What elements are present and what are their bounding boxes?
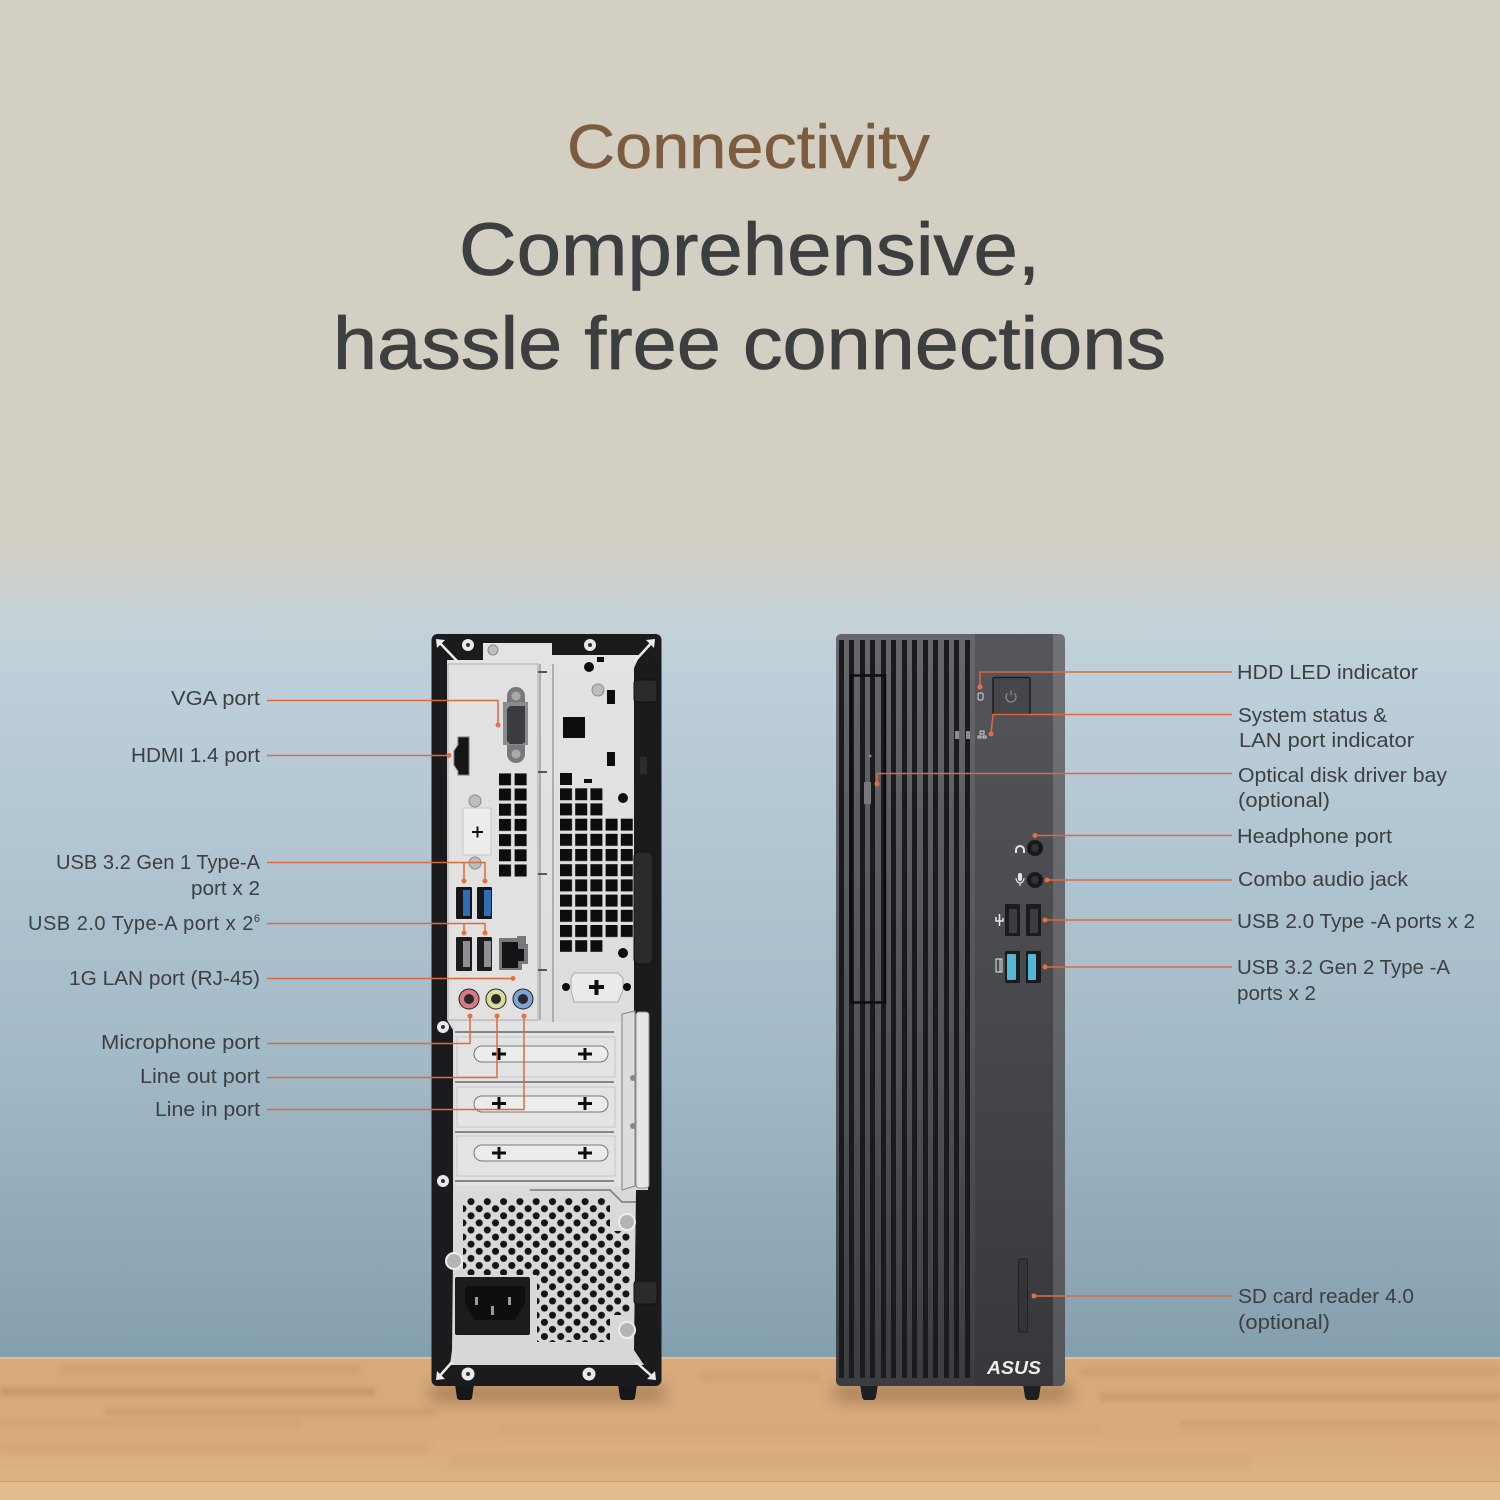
LAN port [499,936,528,970]
subtitle: Connectivity: Connectivity [567,113,930,182]
label: System status and LAN port indicator: LAN port indicator [1239,730,1414,752]
HDMI port [454,737,469,775]
I/O shield [448,664,538,1020]
floor shadows [430,1386,1070,1400]
blanking cover with plus [463,808,491,855]
USB 2.0 ports [456,937,492,971]
label: Line in port: Line in port [155,1099,260,1121]
label: USB 3.2 Gen 1 Type-A port x 2: port x 2 [191,878,260,900]
label: Line out port: Line out port [140,1066,260,1088]
headline: hassle free connections [333,302,1166,385]
front feet [860,1384,1041,1400]
label: 1G LAN port: 1G LAN port (RJ-45) [69,968,260,990]
rear chassis frame [432,634,662,1386]
label: SD card reader 4.0: (optional) [1238,1312,1330,1334]
fin stripes [839,640,970,1378]
bottom right plus cutout [562,973,631,1002]
label: USB 3.2 Gen 1 Type-A port x 2 [56,852,261,900]
HDD and status icons [978,693,986,738]
combo audio jack [1016,872,1044,888]
labels: rear ports [28,688,261,1121]
power button [993,678,1030,714]
ASUS logo: ASUS [986,1358,1041,1378]
rear view of desktop tower [432,634,662,1400]
status LEDs [955,731,959,739]
labels: front ports [1237,662,1475,1334]
label: Combo audio jack: Combo audio jack [1238,869,1409,891]
label: Optical disk driver bay [1238,765,1447,812]
ventilation holes right [560,773,633,952]
upper plate cutouts [563,657,647,958]
label: System status and LAN port indicator: System status & [1238,705,1388,727]
silver back plate [447,643,648,1365]
label: USB 2.0 Type-A port x 2: 6 [254,913,260,925]
audio jacks [459,989,533,1009]
headline [333,208,1166,385]
label: SD card reader 4.0 [1238,1286,1414,1334]
label: USB 2.0 Type -A ports x 2: USB 2.0 Type -A ports x 2 [1237,911,1475,933]
label: USB 3.2 Gen 2 Type -A ports x 2: USB 3.2 Gen 2 Type -A [1237,957,1451,979]
USB 3.2 Gen 1 ports [456,887,492,919]
headline: Comprehensive, [459,208,1040,291]
side clips [634,680,657,1304]
callout lines: rear [267,700,526,1110]
label: VGA port: VGA port [171,688,260,710]
VGA port [503,687,528,763]
PSU screws [446,1214,635,1338]
label: HDD LED indicator: HDD LED indicator [1237,662,1418,684]
SD card slot [1018,1259,1028,1332]
optical drive bay [851,676,885,1002]
power socket [455,1277,530,1335]
label: USB 3.2 Gen 2 Type -A ports x 2: ports x 2 [1237,983,1316,1005]
side strip [1053,634,1065,1386]
divider rail [540,664,553,1022]
front body [836,634,1065,1386]
front USB 3.2 ports [996,951,1041,983]
wooden floor [0,1357,1500,1500]
label: Microphone port: Microphone port [101,1032,260,1054]
front view of desktop tower [836,634,1065,1400]
expansion slots [455,1011,649,1202]
label: HDMI 1.4 port: HDMI 1.4 port [131,745,260,767]
screws [469,645,604,869]
label: System status and LAN port indicator [1238,705,1414,752]
fin panel [836,634,975,1386]
label: USB 3.2 Gen 1 Type-A port x 2: USB 3.2 Gen 1 Type-A [56,852,261,874]
label: Optical disk driver bay: (optional) [1238,790,1330,812]
label: USB 2.0 Type-A port x 2: USB 2.0 Type-A port x 2 [28,913,253,935]
corner arrows and mounting holes [436,634,656,1380]
label: Headphone port: Headphone port [1237,826,1392,848]
ventilation holes left [499,773,527,878]
rear feet [455,1384,637,1400]
label: SD card reader 4.0: SD card reader 4.0 [1238,1286,1414,1308]
callout lines: front [874,672,1232,1298]
PSU vent [463,1198,630,1342]
headphone port [1016,840,1044,856]
label: USB 3.2 Gen 2 Type -A ports x 2 [1237,957,1451,1005]
front USB 2.0 ports [996,904,1041,936]
label: Optical disk driver bay: Optical disk driver bay [1238,765,1447,787]
